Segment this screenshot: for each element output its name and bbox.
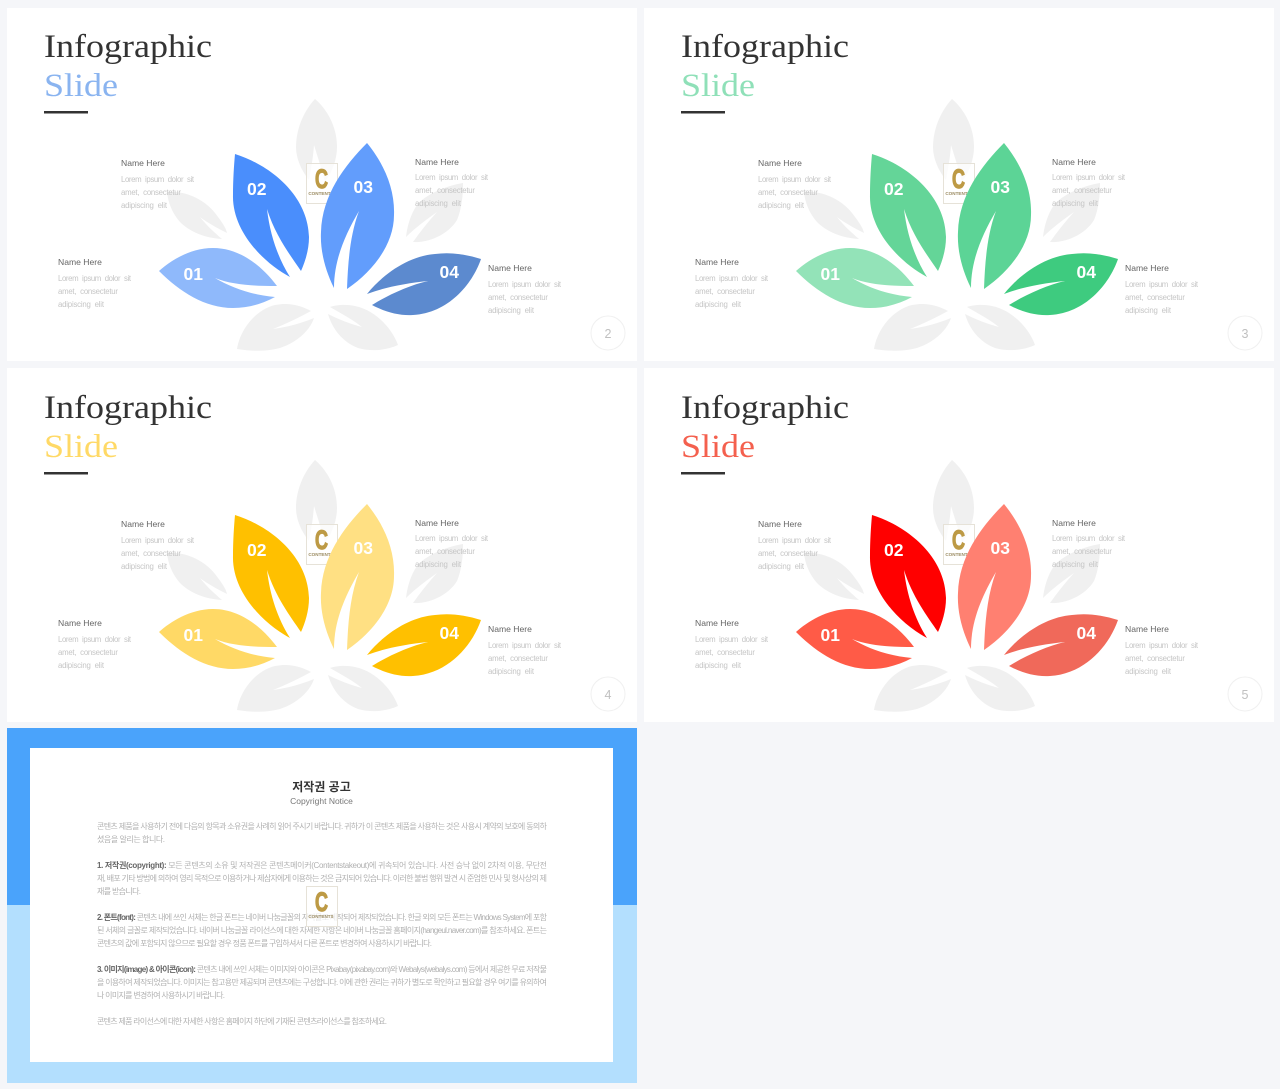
text block 04: amet, consectetur: [1125, 293, 1185, 302]
logo watermark: C: [315, 887, 328, 917]
notice section 1: 1. 저작권(copyright): 모든 콘텐츠의 소유 및 저작권은 콘텐츠메이커(Contentstakeout)에 귀속되어 있습니다. 사전 승낙 없이 2차적 이용, 무단전: [97, 860, 547, 870]
text block 03: amet, consectetur: [1052, 547, 1112, 556]
text block 03: Name Here: [1052, 157, 1096, 167]
notice section 1: 재, 배포 기타 방법에 의하여 영리 목적으로 이용하거나 제삼자에게 이용하는 것은 금지되어 있습니다. 이러한 불법 행위 발견 시 준엄한 민사 및 형사상의 제: [97, 873, 547, 883]
text block 01: amet, consectetur: [695, 287, 755, 296]
leaf 03: [321, 504, 394, 650]
leaf numbers: 02: [247, 179, 267, 199]
text block 02: Lorem ipsum dolor sit: [758, 175, 832, 184]
page number: 5: [1242, 688, 1249, 702]
notice section 3: 나 이미지를 변경하여 사용하시기 바랍니다.: [97, 990, 225, 1000]
text block 03: Name Here: [1052, 518, 1096, 528]
logo watermark: C: [315, 525, 328, 555]
leaf numbers: 01: [184, 625, 203, 645]
text block 01: Name Here: [695, 257, 739, 267]
text block 02: adipiscing elit: [758, 562, 805, 571]
text block 04: [1125, 624, 1199, 676]
text block 01: amet, consectetur: [695, 648, 755, 657]
panel: blue slide: [7, 8, 637, 361]
leaf numbers: [184, 177, 459, 284]
text block 02: amet, consectetur: [758, 188, 818, 197]
logo watermark: CONTENTS: [945, 191, 971, 196]
text block 01: Lorem ipsum dolor sit: [58, 635, 132, 644]
notice subheading: Copyright Notice: [290, 796, 353, 806]
leaf 04: [1004, 614, 1118, 676]
text block 04: adipiscing elit: [1125, 306, 1172, 315]
title: Infographic Slide yellow: [44, 390, 212, 465]
notice section 1: [97, 860, 547, 896]
text block 04: [488, 263, 562, 315]
text block 02: [121, 158, 195, 210]
text block 01: adipiscing elit: [695, 661, 742, 670]
leaf numbers: 03: [990, 177, 1010, 197]
text block 01: Lorem ipsum dolor sit: [695, 635, 769, 644]
leaf 04: [1004, 253, 1118, 315]
text block 01: Lorem ipsum dolor sit: [695, 274, 769, 283]
title underline: [681, 472, 725, 474]
page number: [1228, 677, 1262, 711]
leaf numbers: 01: [820, 625, 840, 645]
text block 04: Lorem ipsum dolor sit: [1125, 641, 1199, 650]
title: Infographic Slide yellow: Slide: [44, 429, 118, 465]
notice closing line: 콘텐츠 제품 라이선스에 대한 자세한 사항은 홈페이지 하단에 기재된 콘텐츠라이선스를 참조하세요.: [97, 1016, 387, 1026]
text block 03: [415, 518, 489, 569]
title underline: [44, 111, 88, 114]
leaf numbers: 03: [354, 538, 373, 558]
notice section 3: 을 이용하여 제작되었습니다. 이미지는 참고용만 제공되며 콘텐츠에는 구성합니다. 이에 관한 권리는 귀하가 별도로 확인하고 필요할 경우 여기를 유의하여: [97, 977, 547, 987]
leaf 04: [367, 253, 481, 315]
text block 02: [121, 519, 195, 571]
text block 04: adipiscing elit: [488, 306, 535, 315]
text block 02: amet, consectetur: [758, 549, 818, 558]
text block 04: amet, consectetur: [488, 293, 548, 302]
leaf numbers: 04: [1076, 262, 1096, 282]
text block 03: Lorem ipsum dolor sit: [415, 173, 489, 182]
logo watermark: C: [952, 525, 965, 555]
logo watermark: [306, 164, 338, 204]
logo watermark: [944, 524, 974, 564]
text block 01: [58, 618, 132, 670]
leaf numbers: 02: [247, 540, 267, 560]
logo watermark: [306, 886, 338, 926]
leaf numbers: 03: [990, 538, 1010, 558]
logo watermark: CONTENTS: [945, 552, 971, 557]
grey background leaves: [167, 460, 463, 712]
page number: [591, 677, 625, 711]
panel: green slide: [644, 8, 1274, 361]
text block 04: Name Here: [488, 263, 532, 273]
leaf numbers: 03: [354, 177, 373, 197]
grey background leaves: [167, 99, 463, 351]
leaf numbers: 04: [1076, 623, 1096, 643]
leaf 03: [321, 143, 394, 289]
leaf numbers: 02: [884, 179, 904, 199]
notice intro paragraph: 콘텐츠 제품을 사용하기 전에 다음의 항목과 소유권을 사례히 읽어 주시기 바랍니다. 귀하가 이 콘텐츠 제품을 사용하는 것은 사용시 계약의 보호에 동의하: [97, 821, 548, 831]
text block 04: adipiscing elit: [1125, 667, 1172, 676]
text block 04: Lorem ipsum dolor sit: [1125, 280, 1199, 289]
title: Infographic Slide red: Infographic: [681, 390, 849, 426]
panel: yellow slide: [7, 368, 637, 722]
title underline: [44, 472, 88, 474]
leaf numbers: 04: [440, 623, 459, 643]
text block 04: Lorem ipsum dolor sit: [488, 280, 562, 289]
text block 02: adipiscing elit: [758, 201, 805, 210]
title: Infographic Slide blue: Infographic: [44, 29, 212, 65]
text block 03: adipiscing elit: [1052, 199, 1099, 208]
text block 01: Name Here: [58, 618, 102, 628]
logo watermark: [944, 164, 974, 204]
text block 04: amet, consectetur: [488, 654, 548, 663]
text block 02: [758, 519, 832, 571]
leaf numbers: 02: [884, 540, 904, 560]
text block 04: Name Here: [488, 624, 532, 634]
notice section 2: [97, 912, 548, 948]
text block 03: Lorem ipsum dolor sit: [415, 534, 489, 543]
text block 02: Name Here: [758, 158, 802, 168]
text block 01: adipiscing elit: [58, 300, 105, 309]
leaf 01: [159, 609, 277, 669]
text block 03: Name Here: [415, 518, 459, 528]
text block 02: [758, 158, 832, 210]
text block 01: adipiscing elit: [58, 661, 105, 670]
notice section 2: 된 서체의 글꼴로 제작되었습니다. 네이버 나눔글꼴 라이선스에 대한 자세한 사항은 네이버 나눔글꼴 홈페이지(hangeul.naver.com)를 참조하세요. 폰트는: [97, 925, 547, 935]
text block 04: [1125, 263, 1199, 315]
text block 02: adipiscing elit: [121, 562, 168, 571]
leaf 02: [233, 515, 309, 638]
leaf 03: [958, 143, 1031, 289]
page number: 2: [605, 327, 612, 341]
text block 01: Name Here: [58, 257, 102, 267]
text block 01: amet, consectetur: [58, 648, 118, 657]
text block 03: amet, consectetur: [1052, 186, 1112, 195]
leaf numbers: 01: [820, 264, 840, 284]
text block 01: [58, 257, 132, 309]
title: Infographic Slide green: [681, 29, 849, 104]
text block 03: adipiscing elit: [415, 560, 462, 569]
title: Infographic Slide blue: Slide: [44, 68, 118, 104]
text block 01: [695, 618, 769, 670]
title: Infographic Slide green: Slide: [681, 68, 755, 104]
page number: [1228, 316, 1262, 350]
logo watermark: C: [315, 164, 328, 194]
title: Infographic Slide blue: [44, 29, 212, 104]
leaf 04: [367, 614, 481, 676]
text block 03: [1052, 518, 1126, 569]
text block 03: adipiscing elit: [415, 199, 462, 208]
notice section 3: [97, 964, 547, 1000]
text block 02: adipiscing elit: [121, 201, 168, 210]
title: Infographic Slide red: [681, 390, 849, 465]
notice intro paragraph: [97, 821, 548, 844]
panel: red slide: [644, 368, 1274, 722]
text block 03: Name Here: [415, 157, 459, 167]
text block 04: Name Here: [1125, 263, 1169, 273]
text block 01: adipiscing elit: [695, 300, 742, 309]
text block 01: Lorem ipsum dolor sit: [58, 274, 132, 283]
logo watermark: CONTENTS: [308, 191, 334, 196]
leaf 03: [958, 504, 1031, 650]
leaf numbers: 01: [184, 264, 203, 284]
notice section 2: 콘텐츠의 값에 포함되지 않으므로 필요할 경우 정품 폰트를 구입하셔서 다른 폰트로 변경하여 사용하시기 바랍니다.: [97, 938, 432, 948]
logo watermark: C: [952, 164, 965, 194]
text block 02: amet, consectetur: [121, 549, 181, 558]
leaf numbers: [184, 538, 459, 645]
text block 04: Lorem ipsum dolor sit: [488, 641, 562, 650]
text block 01: Name Here: [695, 618, 739, 628]
text block 04: Name Here: [1125, 624, 1169, 634]
text block 01: amet, consectetur: [58, 287, 118, 296]
text block 03: adipiscing elit: [1052, 560, 1099, 569]
text block 04: [488, 624, 562, 676]
page number: [591, 316, 625, 350]
notice heading: 저작권 공고: [292, 779, 351, 794]
text block 04: adipiscing elit: [488, 667, 535, 676]
leaf 01: [796, 609, 914, 669]
page number: 3: [1242, 327, 1249, 341]
text block 03: amet, consectetur: [415, 186, 475, 195]
grey background leaves: [804, 460, 1100, 712]
logo watermark: CONTENTS: [308, 552, 334, 557]
notice card: [30, 748, 613, 1062]
leaf 02: [233, 154, 309, 277]
leaf 01: [159, 248, 277, 308]
leaf numbers: [820, 538, 1096, 645]
notice section 1: 재를 받습니다.: [97, 886, 141, 896]
text block 02: Lorem ipsum dolor sit: [121, 536, 195, 545]
text block 03: Lorem ipsum dolor sit: [1052, 173, 1126, 182]
text block 02: Name Here: [758, 519, 802, 529]
leaf numbers: [820, 177, 1096, 284]
leaf numbers: 04: [440, 262, 459, 282]
page number: 4: [605, 688, 612, 702]
text block 03: [1052, 157, 1126, 208]
title underline: [681, 111, 725, 114]
notice intro paragraph: 셨음을 알리는 합니다.: [97, 834, 165, 844]
title: Infographic Slide green: Infographic: [681, 29, 849, 65]
title: Infographic Slide yellow: Infographic: [44, 390, 212, 426]
text block 02: amet, consectetur: [121, 188, 181, 197]
logo watermark: CONTENTS: [308, 914, 334, 919]
text block 03: amet, consectetur: [415, 547, 475, 556]
text block 02: Name Here: [121, 519, 165, 529]
text block 03: [415, 157, 489, 208]
notice section 2: 2. 폰트(font): 콘텐츠 내에 쓰인 서체는 한글 폰트는 네이버 나눔글꼴의 저작물로 제작되어 제작되었습니다. 한글 외의 모든 폰트는 Windows System에 포함: [97, 912, 548, 922]
text block 04: amet, consectetur: [1125, 654, 1185, 663]
notice section 3: 3. 이미지(image) & 아이콘(icon): 콘텐츠 내에 쓰인 서체는 이미지와 아이콘은 Pixabay(pixabay.com)와 Webalys(webalys.com) 등에서 제공한 무료 저작물: [97, 964, 547, 974]
title: Infographic Slide red: Slide: [681, 429, 755, 465]
text block 02: Name Here: [121, 158, 165, 168]
logo watermark: [306, 524, 338, 564]
text block 03: Lorem ipsum dolor sit: [1052, 534, 1126, 543]
leaf 01: [796, 248, 914, 308]
leaf 02: [870, 515, 946, 638]
panel: copyright notice slide: [7, 728, 637, 1083]
text block 02: Lorem ipsum dolor sit: [758, 536, 832, 545]
text block 01: [695, 257, 769, 309]
leaf 02: [870, 154, 946, 277]
grey background leaves: [804, 99, 1100, 351]
text block 02: Lorem ipsum dolor sit: [121, 175, 195, 184]
